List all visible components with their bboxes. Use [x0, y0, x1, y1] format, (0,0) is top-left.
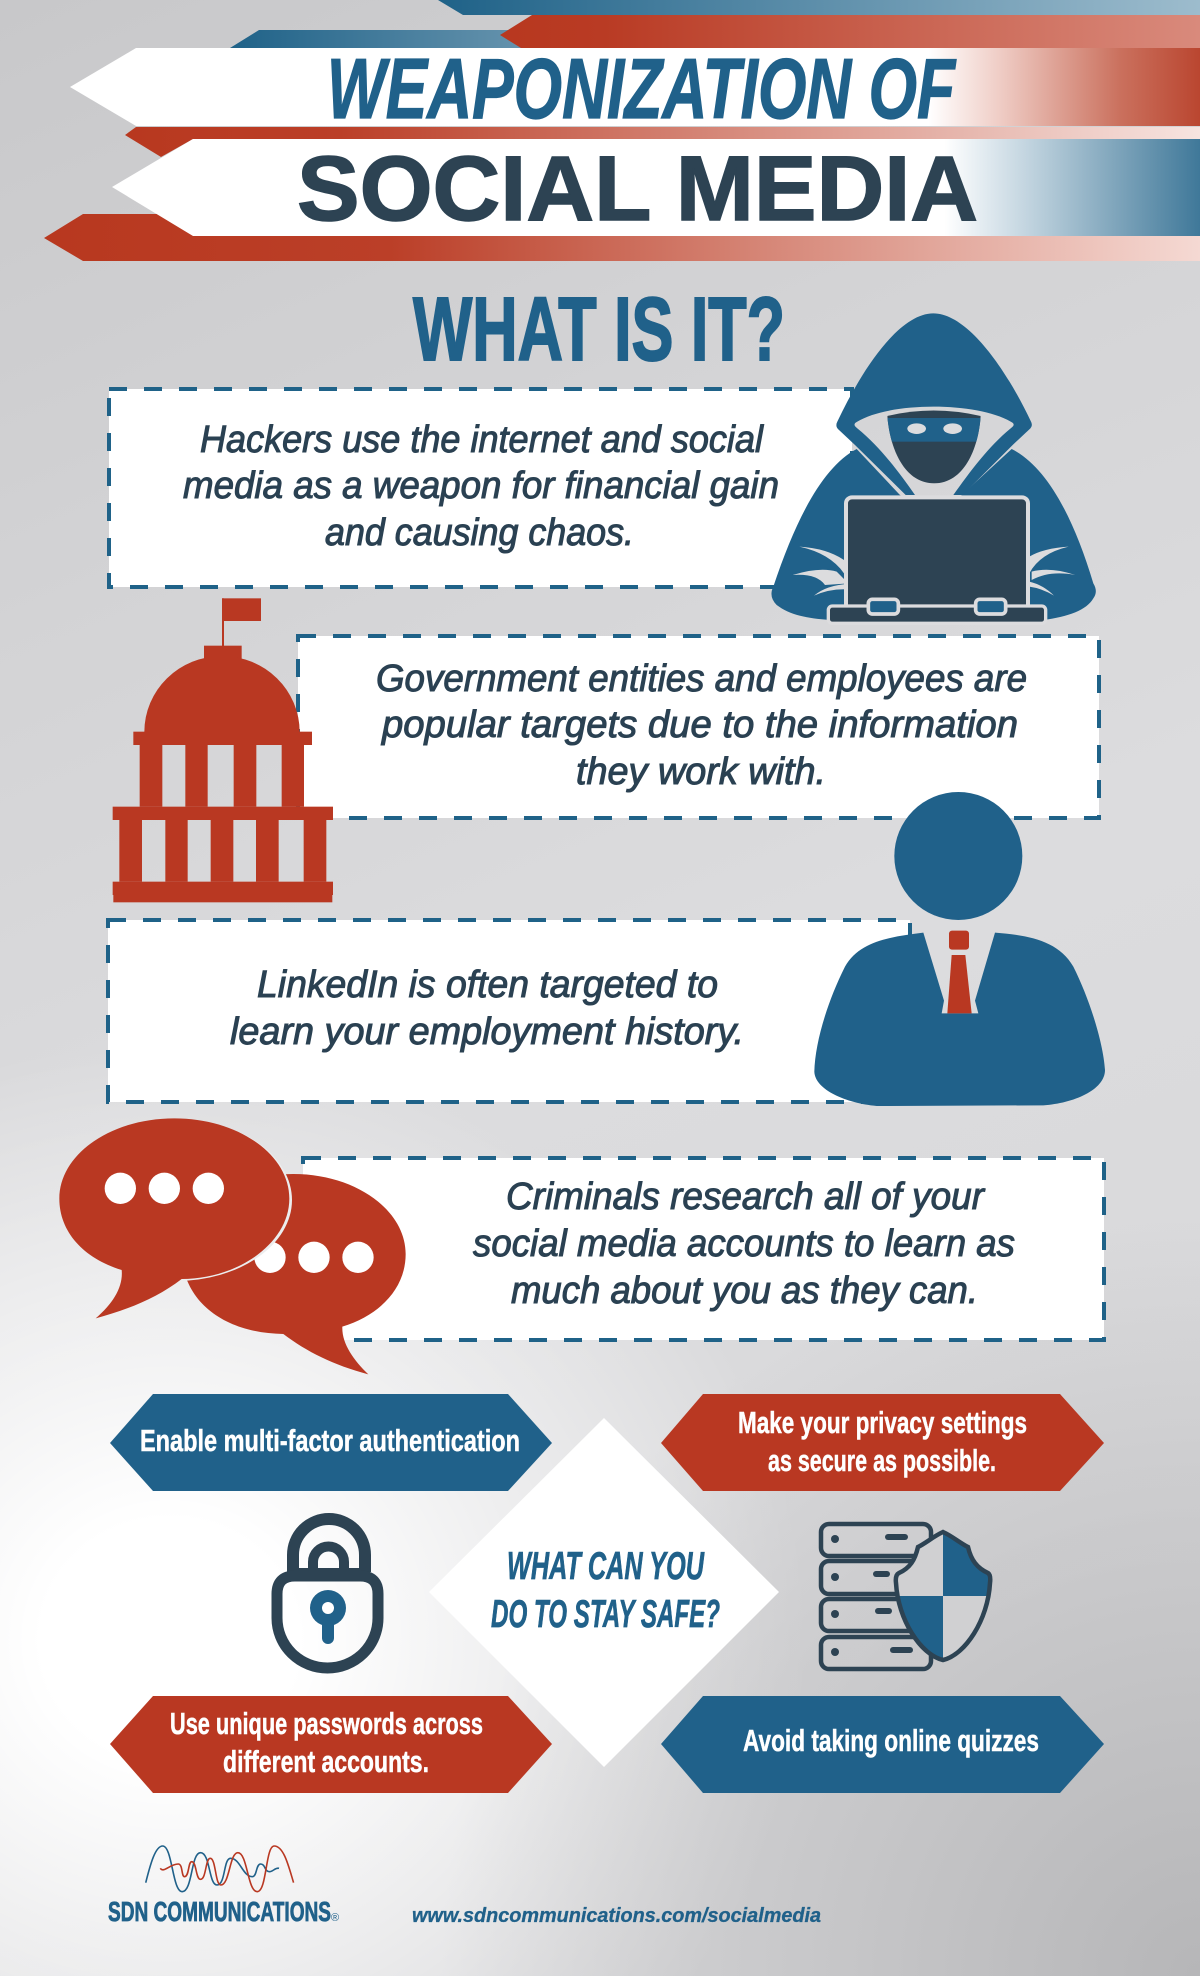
- hackers text: media as a weapon for financial gain: [183, 465, 779, 507]
- title line 2: SOCIAL MEDIA: [297, 138, 978, 240]
- hackers text: [183, 419, 779, 554]
- person torso: [814, 933, 1105, 1106]
- necktie: [947, 931, 972, 1013]
- criminals text: [473, 1176, 1015, 1312]
- callout: privacy settings: as secure as possible.: [768, 1443, 996, 1478]
- person head: [894, 792, 1022, 920]
- linkedin text: LinkedIn is often targeted to: [257, 964, 718, 1006]
- logo wave lines: [146, 1846, 294, 1892]
- callout: unique passwords: [110, 1696, 552, 1793]
- diamond: what can you do: WHAT CAN YOU: [507, 1545, 705, 1588]
- icon: servers with shield: [821, 1524, 1000, 1669]
- panel: linkedin: [108, 920, 910, 1102]
- criminals text: social media accounts to learn as: [473, 1223, 1015, 1265]
- shield: [894, 1530, 992, 1662]
- hacker eyes: [907, 423, 962, 434]
- server racks: [821, 1524, 931, 1669]
- logo wordmark: SDN COMMUNICATIONS: [108, 1896, 331, 1927]
- middle red ribbon: [125, 127, 1200, 157]
- icon: capitol building: [113, 598, 333, 902]
- callout: unique passwords: Use unique passwords across: [170, 1706, 483, 1741]
- callout: unique passwords: different accounts.: [223, 1744, 429, 1779]
- top red ribbon: [500, 15, 1200, 48]
- panel: hackers: [109, 389, 852, 587]
- hacker fingers: [793, 547, 1075, 596]
- hacker shoulders: [771, 449, 1096, 620]
- government text: [376, 658, 1027, 793]
- title banner: [44, 0, 1200, 261]
- callout: online quizzes: [661, 1696, 1104, 1793]
- registered mark: ®: [331, 1912, 339, 1924]
- government text: Government entities and employees are: [376, 658, 1027, 700]
- callout: online quizzes: Avoid taking online quizzes: [743, 1723, 1039, 1758]
- callout: privacy settings: Make your privacy settings: [738, 1405, 1027, 1440]
- server lights: [831, 1534, 913, 1656]
- government text: popular targets due to the information: [381, 704, 1018, 746]
- lower white ribbon: [112, 139, 1200, 236]
- front bubble: [59, 1118, 292, 1318]
- criminals text: much about you as they can.: [511, 1270, 978, 1312]
- bottom red ribbon: [44, 214, 1200, 261]
- icon: person with tie: [814, 792, 1105, 1106]
- diamond: what can you do: DO TO STAY SAFE?: [491, 1593, 720, 1636]
- title line 1: WEAPONIZATION OF: [327, 42, 957, 137]
- linkedin text: learn your employment history.: [230, 1011, 744, 1053]
- small blue ribbon: [230, 30, 530, 48]
- hackers text: Hackers use the internet and social: [200, 419, 764, 461]
- footer url: www.sdncommunications.com/socialmedia: [412, 1905, 821, 1927]
- back bubble: [182, 1174, 406, 1374]
- icon: hacker at laptop: [771, 313, 1096, 623]
- criminals text: Criminals research all of your: [506, 1176, 985, 1218]
- laptop: [846, 497, 1028, 611]
- logo: SDN Communications: [108, 1846, 339, 1927]
- hacker mask: [887, 410, 981, 484]
- icon: speech bubbles: [59, 1118, 406, 1374]
- callout: enable multi-factor: Enable multi-factor authentication: [140, 1423, 520, 1458]
- linkedin text: [230, 964, 744, 1053]
- diamond: what can you do: [429, 1418, 779, 1767]
- panel: government: [298, 636, 1099, 818]
- panel: criminals: [303, 1158, 1104, 1340]
- upper white ribbon: [70, 48, 1200, 126]
- government text: they work with.: [576, 751, 826, 793]
- icon: padlock: [277, 1519, 378, 1668]
- heading: what is it: WHAT IS IT?: [413, 280, 785, 380]
- hacker hood: [836, 313, 1032, 495]
- callout: privacy settings: [661, 1394, 1104, 1491]
- top blue ribbon: [438, 0, 1200, 15]
- callout: enable multi-factor: [110, 1394, 552, 1491]
- hackers text: and causing chaos.: [325, 512, 634, 554]
